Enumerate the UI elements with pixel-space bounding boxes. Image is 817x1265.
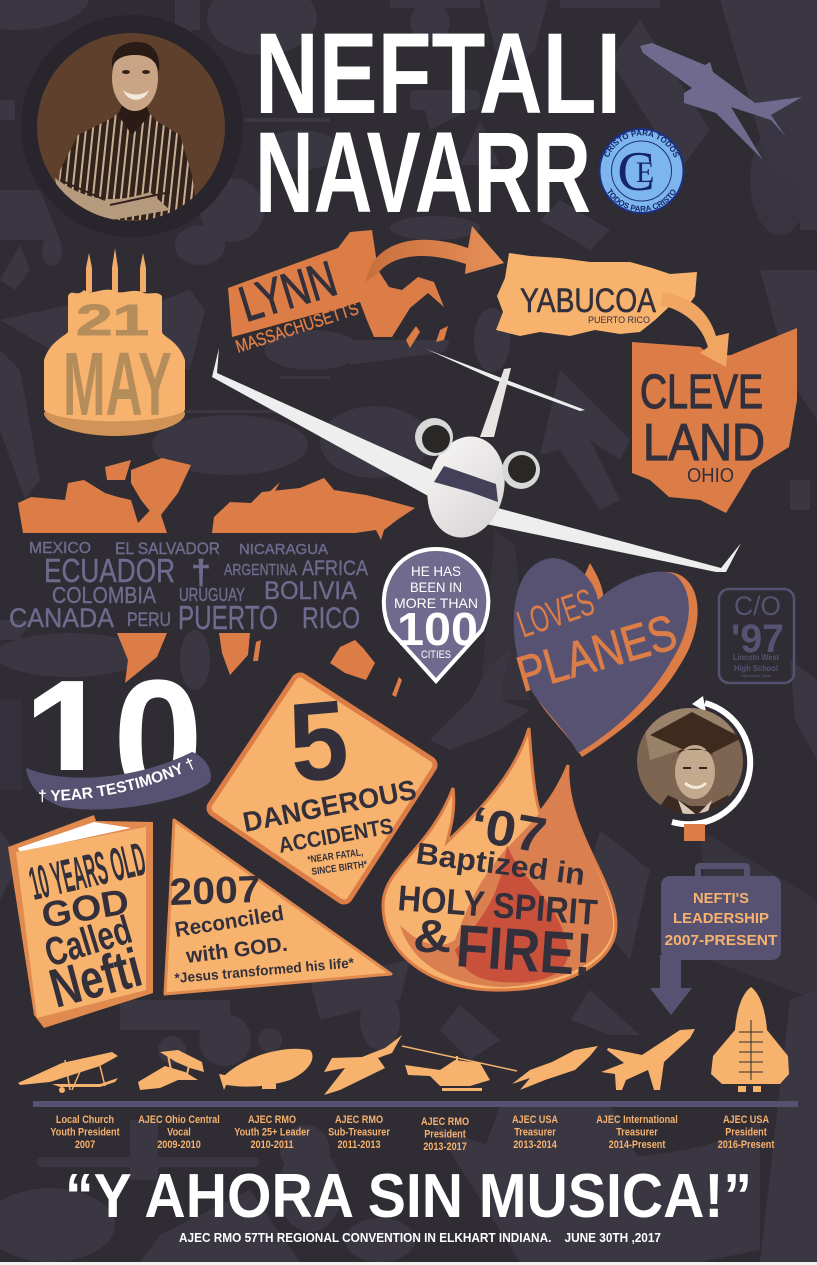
title — [255, 10, 621, 237]
triangle: 2007 reconciled: 2007 — [169, 869, 261, 914]
label: Sub-Treasurer: 2011-2013 — [337, 1139, 381, 1151]
map pin: 100 cities: 100 — [397, 603, 478, 655]
title: NAVARR — [255, 109, 591, 237]
label: Youth Leader: AJEC RMO — [248, 1114, 296, 1126]
map: Ohio — [632, 328, 797, 513]
logo: Cristo Para Todos badge: CRISTO PARA TODOS — [604, 130, 679, 158]
timeline labels — [50, 1114, 775, 1153]
road sign: 5 dangerous accidents: ACCIDENTS — [277, 813, 395, 858]
icon: propeller plane — [324, 1035, 402, 1095]
map: Massachusetts — [228, 230, 448, 357]
heart: loves planes: PLANES — [511, 604, 683, 703]
map: Massachusetts: MASSACHUSETTS — [233, 298, 361, 357]
list of countries visited: PUERTO — [178, 599, 278, 636]
list of countries visited: NICARAGUA — [239, 541, 328, 558]
heart: loves planes: LOVES — [512, 581, 600, 647]
road sign: 5 dangerous accidents — [216, 676, 428, 895]
triangle: 2007 reconciled: with GOD. — [184, 933, 289, 968]
flame: baptized in Holy Spirit and fire — [383, 728, 616, 990]
birthday cake: 21 May — [44, 248, 185, 436]
portrait photo — [37, 33, 225, 221]
map: Ohio: OHIO — [687, 465, 734, 487]
label: International Treasurer: 2014-Present — [609, 1139, 666, 1151]
suitcase: Nefti's leadership: NEFTI'S — [693, 890, 749, 907]
right engine — [502, 451, 540, 489]
timeline bar — [33, 1101, 798, 1107]
flame: baptized in Holy Spirit and fire: ‘07 — [466, 796, 551, 864]
map: Puerto Rico — [496, 253, 697, 336]
list of countries visited: † — [191, 554, 211, 592]
list of countries visited: EL SALVADOR — [115, 539, 220, 558]
book: called at 10 years old — [8, 815, 153, 1028]
book: called at 10 years old: Nefti — [43, 936, 148, 1020]
globe frame with graduation photo — [630, 696, 750, 841]
badge: class of 97: C/O — [734, 591, 781, 621]
label: Sub-Treasurer: AJEC RMO — [335, 1114, 383, 1126]
list of countries visited: RICO — [302, 602, 360, 635]
world map: southern landmasses — [117, 633, 402, 697]
map: Ohio: LAND — [643, 414, 765, 472]
arrow: Yabucoa to Cleveland — [660, 293, 729, 367]
logo: Cristo Para Todos badge: C — [617, 141, 655, 203]
list of countries visited: PERU — [127, 610, 171, 631]
arrow: Lynn to Yabucoa — [366, 226, 504, 282]
road sign: 5 dangerous accidents: SINCE BIRTH* — [311, 859, 368, 878]
logo: Cristo Para Todos badge: TODOS PARA CRISTO — [608, 188, 676, 212]
list of countries visited: MEXICO — [29, 540, 91, 557]
badge: class of 97: '97 — [731, 617, 784, 661]
label: Local Church: Youth President — [50, 1127, 120, 1139]
icon: purple airplane — [640, 43, 802, 160]
arrow: leadership timeline down — [650, 955, 692, 1015]
infographic canvas: 10 YEARS OLD — [24, 832, 150, 910]
list of countries visited: CANADA — [9, 603, 114, 633]
map: Puerto Rico: PUERTO RICO — [588, 315, 650, 326]
book: called at 10 years old: GOD — [38, 880, 132, 936]
large white jet — [212, 348, 741, 572]
label: USA Treasurer: 2013-2014 — [513, 1139, 557, 1151]
label: International Treasurer: Treasurer — [616, 1127, 658, 1139]
label: Youth Leader: 2010-2011 — [250, 1139, 294, 1151]
list of countries visited: ECUADOR — [44, 552, 175, 589]
birthday cake: 21 May: 21 — [76, 296, 149, 345]
label: Ohio Central: 2009-2010 — [157, 1139, 201, 1151]
flame: baptized in Holy Spirit and fire: & — [413, 910, 451, 962]
label: USA Treasurer: AJEC USA — [512, 1114, 558, 1126]
map pin: 100 cities: CITIES — [421, 649, 451, 661]
flame: baptized in Holy Spirit and fire: Baptized in — [414, 837, 587, 892]
label: International Treasurer: AJEC International — [596, 1114, 678, 1126]
label: Ohio Central: Vocal — [167, 1127, 191, 1139]
icon: fighter jet — [512, 1046, 598, 1090]
flame: baptized in Holy Spirit and fire: HOLY SPIRIT — [396, 877, 599, 933]
list of countries visited: ARGENTINA — [224, 562, 297, 579]
book: called at 10 years old: Called — [40, 908, 137, 976]
badge: class of 97 — [719, 589, 794, 683]
photo frame ring — [21, 15, 243, 237]
icon: helicopter — [402, 1046, 517, 1091]
map pin: 100 cities: HE HAS — [411, 563, 461, 579]
road sign: 5 dangerous accidents: DANGEROUS — [240, 774, 419, 838]
right wing — [481, 507, 741, 572]
logo: Cristo Para Todos badge: E — [636, 156, 654, 189]
label: USA President: AJEC USA — [723, 1114, 769, 1126]
list of countries visited — [9, 539, 368, 636]
label: RMO President: 2013-2017 — [423, 1141, 467, 1153]
list of countries visited: AFRICA — [302, 557, 368, 580]
map pin: 100 cities: MORE THAN — [394, 595, 478, 611]
suitcase: Nefti's leadership — [661, 863, 781, 960]
logo: Cristo Para Todos badge — [598, 128, 684, 214]
fuselage — [418, 429, 514, 545]
left engine — [415, 418, 453, 456]
badge: class of 97: Lincoln West — [733, 653, 779, 662]
label: USA President: President — [725, 1127, 767, 1139]
road sign: 5 dangerous accidents: *NEAR FATAL, — [307, 847, 364, 866]
title: NEFTALI — [255, 10, 621, 138]
map: Ohio: CLEVE — [640, 366, 763, 419]
birthday cake: 21 May: MAY — [63, 335, 172, 435]
icon: space shuttle — [711, 987, 789, 1092]
map pin: 100 cities — [384, 549, 488, 681]
label: RMO President: President — [424, 1129, 466, 1141]
quote: “Y AHORA SIN MUSICA!” — [65, 1162, 752, 1231]
world map: northern landmasses — [18, 458, 415, 540]
icon: airliner — [601, 1029, 695, 1090]
big number 10: 10 — [23, 646, 203, 832]
label: Ohio Central: AJEC Ohio Central — [138, 1114, 220, 1126]
icon: blimp — [219, 1049, 313, 1090]
road sign: 5 dangerous accidents: 5 — [284, 676, 353, 806]
event line: AJEC RMO 57TH REGIONAL CONVENTION IN ELKHART INDIANA. JUNE 30TH ,2017 — [179, 1230, 661, 1245]
icon: biplane — [138, 1050, 204, 1090]
list of countries visited: BOLIVIA — [264, 577, 357, 605]
map pin: 100 cities: BEEN IN — [410, 579, 462, 595]
badge: class of 97: High School — [734, 664, 778, 673]
tail fin — [480, 368, 511, 437]
label: USA President: 2016-Present — [718, 1139, 775, 1151]
triangle: 2007 reconciled: *Jesus transformed his life* — [174, 954, 355, 986]
list of countries visited: COLOMBIA — [52, 582, 157, 608]
left wing — [212, 348, 432, 497]
badge: class of 97: Cleveland, Ohio — [741, 673, 772, 678]
label: Local Church: 2007 — [75, 1139, 95, 1151]
flame: baptized in Holy Spirit and fire: FIRE! — [454, 912, 594, 988]
label: RMO President: AJEC RMO — [421, 1116, 469, 1128]
map: Puerto Rico: YABUCOA — [520, 282, 656, 320]
aircraft timeline icons — [18, 987, 789, 1095]
horizontal stabilizer — [426, 349, 585, 411]
label: Youth Leader: Youth 25+ Leader — [234, 1127, 310, 1139]
suitcase: Nefti's leadership: 2007-PRESENT — [664, 932, 778, 949]
ribbon: year testimony: † YEAR TESTIMONY † — [39, 758, 194, 802]
heart: loves planes — [511, 558, 698, 757]
triangle: 2007 reconciled: Reconciled — [173, 902, 285, 942]
label: Local Church: Local Church — [56, 1114, 114, 1126]
label: Sub-Treasurer: Sub-Treasurer — [328, 1127, 390, 1139]
map: Massachusetts: LYNN — [233, 250, 343, 333]
label: USA Treasurer: Treasurer — [514, 1127, 556, 1139]
suitcase: Nefti's leadership: LEADERSHIP — [673, 910, 769, 927]
windshield — [434, 466, 498, 502]
icon: ultralight — [18, 1052, 118, 1093]
triangle: 2007 reconciled — [165, 820, 391, 994]
list of countries visited: URUGUAY — [179, 585, 245, 605]
